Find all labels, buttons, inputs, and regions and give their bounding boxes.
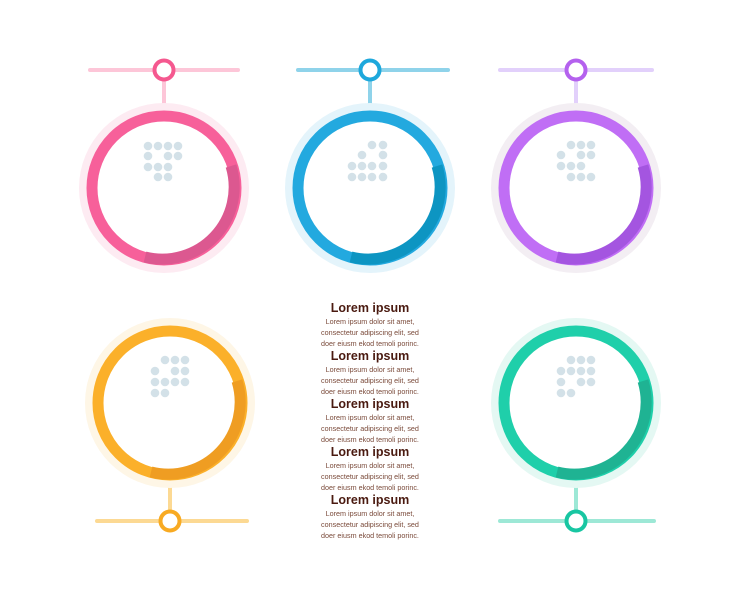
text block 5: doer eiusm ekod temoli porinc. bbox=[321, 531, 419, 540]
step 5: green circle bbox=[491, 318, 661, 530]
text block 4: Lorem ipsum dolor sit amet, bbox=[326, 461, 414, 470]
text block 3 bbox=[321, 397, 419, 444]
step 3: purple circle bbox=[491, 60, 661, 273]
text block 5 bbox=[321, 493, 419, 540]
text block 4: consectetur adipiscing elit, sed bbox=[321, 472, 419, 481]
text block 1 bbox=[321, 301, 419, 348]
text block 3: Lorem ipsum bbox=[331, 397, 409, 411]
text block 3: Lorem ipsum dolor sit amet, bbox=[326, 413, 414, 422]
text block 2: Lorem ipsum dolor sit amet, bbox=[326, 365, 414, 374]
text block 4: doer eiusm ekod temoli porinc. bbox=[321, 483, 419, 492]
text block 2 bbox=[321, 349, 419, 396]
step 4: orange circle bbox=[85, 318, 255, 530]
text block 1: Lorem ipsum bbox=[331, 301, 409, 315]
text block 5: Lorem ipsum dolor sit amet, bbox=[326, 509, 414, 518]
text block 2: consectetur adipiscing elit, sed bbox=[321, 376, 419, 385]
text block 1: Lorem ipsum dolor sit amet, bbox=[326, 317, 414, 326]
text block 5: consectetur adipiscing elit, sed bbox=[321, 520, 419, 529]
text block 2: doer eiusm ekod temoli porinc. bbox=[321, 387, 419, 396]
step 2: blue circle bbox=[285, 60, 455, 273]
text block 5: Lorem ipsum bbox=[331, 493, 409, 507]
text block 1: consectetur adipiscing elit, sed bbox=[321, 328, 419, 337]
text block 3: doer eiusm ekod temoli porinc. bbox=[321, 435, 419, 444]
text block 4: Lorem ipsum bbox=[331, 445, 409, 459]
text block 4 bbox=[321, 445, 419, 492]
text block 3: consectetur adipiscing elit, sed bbox=[321, 424, 419, 433]
step 1: pink circle bbox=[79, 60, 249, 273]
text block 2: Lorem ipsum bbox=[331, 349, 409, 363]
text block 1: doer eiusm ekod temoli porinc. bbox=[321, 339, 419, 348]
